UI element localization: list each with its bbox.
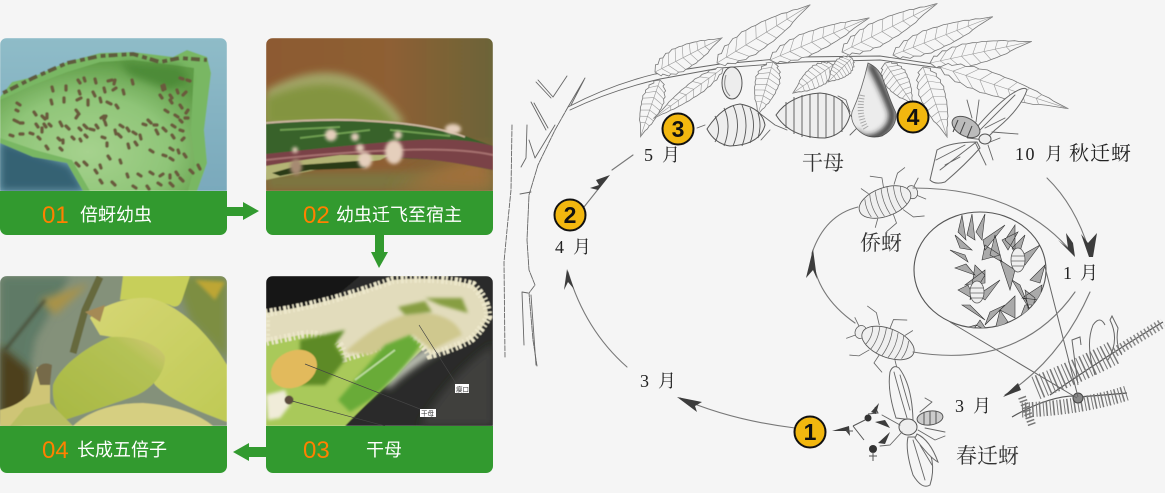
caption bar 01: [0, 191, 227, 235]
autumn migrant: [930, 88, 1027, 183]
photo: gall cross-section: [265, 276, 493, 426]
twig: [568, 56, 940, 110]
caption bar 01: 01: [42, 202, 69, 229]
fundatrix 2: [776, 93, 860, 138]
侨蚜 aphid: [850, 161, 932, 238]
caption bar 03: [266, 426, 493, 473]
arrow: 02 to 03: [371, 235, 388, 268]
month labels: 月: [573, 237, 591, 257]
small morphs near 1: [832, 403, 890, 461]
month labels: 月: [658, 371, 676, 391]
fundatrix 1: [697, 104, 787, 146]
month labels: 春迁蚜: [956, 444, 1019, 468]
badge 4: [898, 102, 928, 132]
cycle arrows: [564, 155, 1097, 428]
label: 瘿口: 瘿口: [456, 384, 469, 394]
badge 3: 3: [672, 116, 684, 142]
lens pointer lines: [950, 267, 1078, 398]
spring migrant: [880, 367, 945, 486]
badge 1: [794, 416, 826, 448]
badge 3: [662, 114, 694, 144]
host moss fern: [1012, 316, 1163, 425]
caption bar 04: 04: [42, 437, 69, 464]
panel: 02 nymphs fly to host: [266, 38, 493, 235]
panel: 03 fundatrix: [265, 276, 493, 473]
lens circle with moss: [914, 212, 1046, 335]
month labels: 月: [973, 396, 991, 416]
caption bar 02: 幼虫迁飞至宿主: [336, 205, 462, 225]
panel: 04 grown galls: [0, 276, 227, 473]
label: 瘿口: [455, 384, 469, 394]
arrow: 01 to 02: [227, 202, 259, 220]
month labels: 干母: [802, 151, 844, 175]
overwintering aphid: [839, 301, 924, 381]
badge 1: 1: [804, 419, 817, 445]
panel: 01 young aphids on leaf: [0, 38, 227, 235]
month labels: 秋迁蚜: [1069, 142, 1132, 165]
leaves: [630, 0, 1072, 141]
label: 干母: [420, 409, 436, 418]
caption bar 02: 02: [303, 202, 330, 229]
photo: aphids on green gall: [0, 38, 227, 191]
caption bar 03: 干母: [366, 440, 402, 460]
badge 2: 2: [564, 202, 576, 228]
badge 4: 4: [907, 104, 920, 130]
large pear gall: [852, 63, 896, 139]
month labels: 3: [955, 396, 964, 416]
month labels: 1: [1063, 263, 1072, 283]
month labels: 5: [644, 145, 653, 165]
photo: yellow-green galls: [0, 276, 227, 426]
month labels: 月: [1045, 144, 1064, 164]
month labels: 3: [640, 371, 649, 391]
photo: stem with white aphids: [266, 38, 493, 191]
label: 干母: 干母: [421, 410, 434, 418]
diagram: aphid life cycle: [504, 0, 1163, 486]
small gall: [722, 67, 742, 99]
month labels: 月: [1080, 263, 1098, 283]
month labels: 10: [1015, 144, 1036, 164]
month labels: 4: [555, 237, 564, 257]
caption bar 04: 长成五倍子: [77, 440, 167, 460]
month labels: [555, 142, 1132, 468]
badge 2: [554, 200, 586, 230]
tree trunk and branches: [504, 76, 585, 366]
month labels: 月: [662, 145, 680, 165]
caption bar 01: 倍蚜幼虫: [80, 205, 152, 225]
caption bar 04: [0, 426, 227, 473]
month labels: 侨蚜: [860, 231, 902, 255]
arrow: 03 to 04: [233, 443, 266, 461]
caption bar 02: [266, 191, 493, 235]
caption bar 03: 03: [303, 437, 330, 464]
